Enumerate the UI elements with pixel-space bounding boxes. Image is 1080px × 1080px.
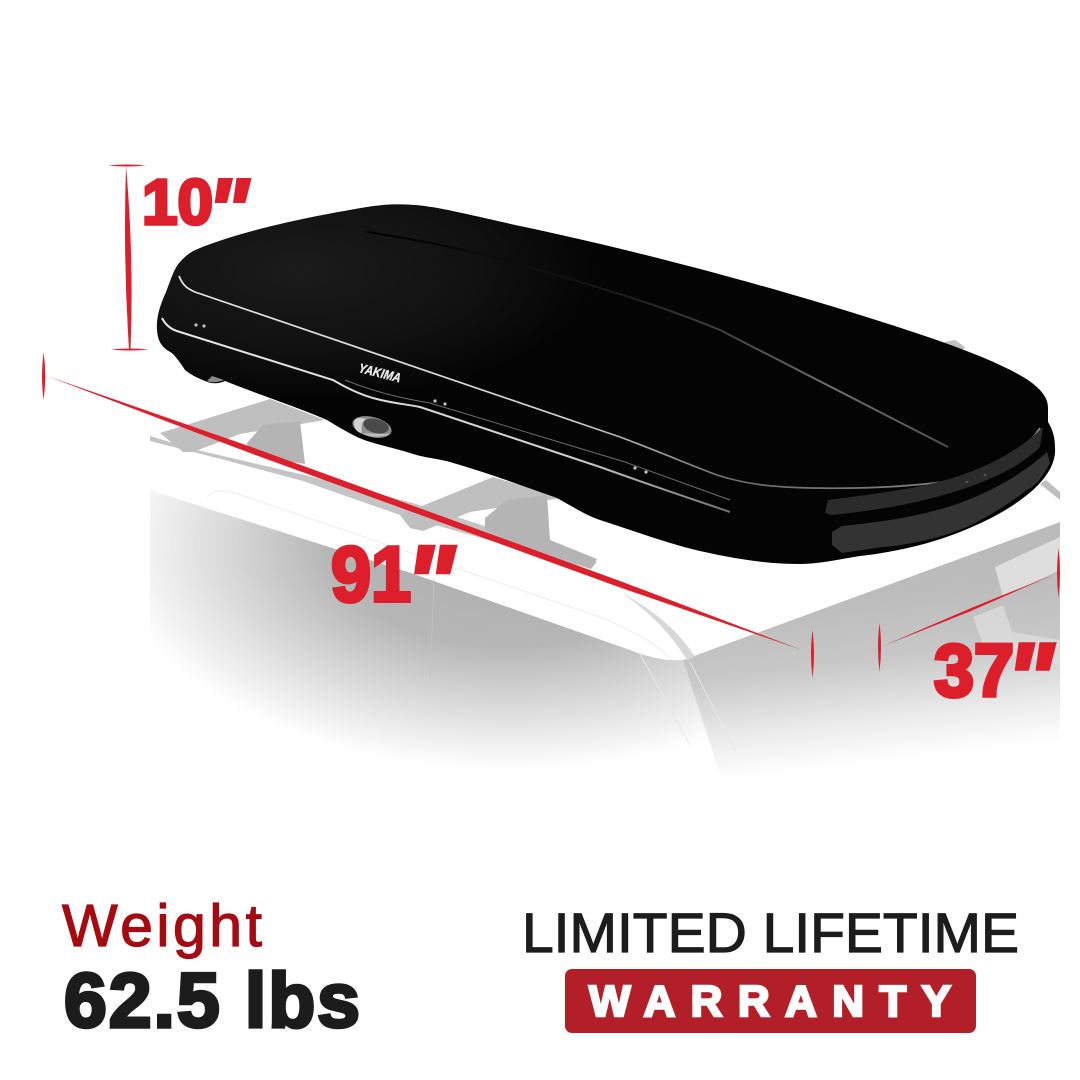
- limited lifetime heading: LIMITED LIFETIME: [522, 901, 1019, 964]
- dimension: height 10 inches: ": [207, 160, 250, 259]
- height label: 10: [142, 166, 213, 238]
- box foot glare: [207, 376, 224, 382]
- box top ridge: [367, 232, 948, 447]
- roof rack: [150, 340, 1060, 569]
- dimension: length 91 inches: [42, 352, 814, 678]
- height bracket: [108, 164, 149, 350]
- box body: [157, 204, 1055, 564]
- dimension: width 37 inches: ": [1006, 623, 1055, 735]
- dimension: length 91 inches: ": [405, 525, 456, 641]
- box lower trim highlight: [162, 318, 730, 512]
- rack: front crossbar: [160, 399, 325, 452]
- width line: [883, 574, 1055, 646]
- rack: rear foot: [485, 495, 597, 569]
- rack: far crossbar ends: [925, 340, 1060, 500]
- width label: 37: [934, 629, 1014, 712]
- cargo box: [157, 204, 1055, 564]
- dimension: width 37 inches: [878, 548, 1060, 735]
- box rivets: [194, 323, 986, 483]
- warranty badge: [565, 969, 976, 1033]
- weight label: Weight: [62, 893, 262, 959]
- vehicle roof and windows: [150, 490, 1060, 790]
- length line: [47, 376, 802, 650]
- length tick marks: [42, 352, 814, 678]
- lower bumper patch: [832, 452, 1050, 553]
- warranty badge: WARRANTY: [589, 977, 951, 1026]
- box lid edge highlight: [179, 276, 1040, 488]
- dimension: height 10 inches: [108, 160, 250, 350]
- rack: rear crossbar: [400, 477, 562, 531]
- width tick marks: [878, 548, 1060, 672]
- lock: [350, 412, 394, 442]
- upper bumper patch: [825, 427, 1043, 515]
- rack: front foot: [247, 421, 305, 464]
- brand logo: YAKIMA: [357, 360, 403, 385]
- rack: long rail: [150, 436, 597, 569]
- weight value: 62.5 lbs: [64, 958, 360, 1044]
- length label: 91: [331, 530, 411, 618]
